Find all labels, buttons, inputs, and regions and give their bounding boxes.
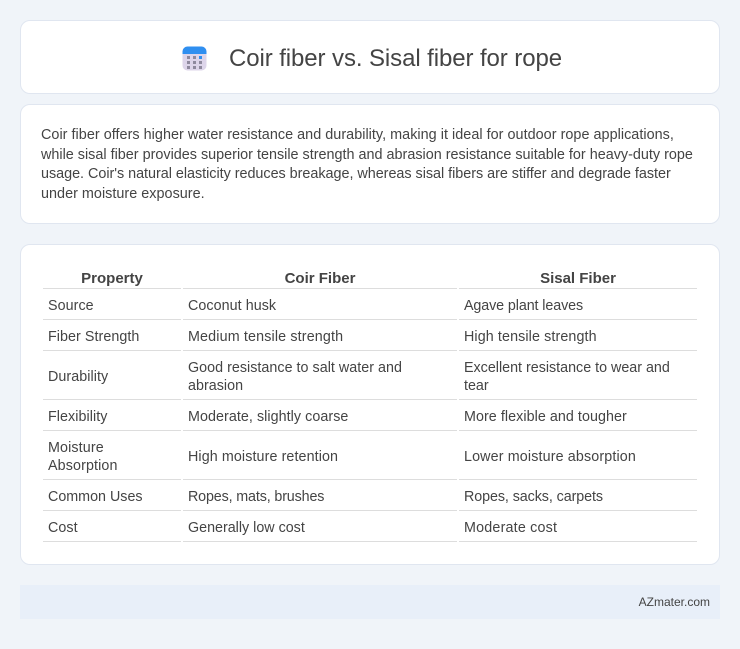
row: durability: abrasion — [188, 378, 243, 394]
footer bar — [20, 585, 720, 619]
row: common uses: Ropes, sacks, carpets — [464, 489, 603, 505]
footer credit: AZmater.com — [639, 595, 710, 609]
row: flexibility: Flexibility — [48, 409, 107, 425]
row: flexibility — [48, 409, 627, 425]
text block: summary: while sisal fiber provides superior tensile strength and abrasion resistance suitable for heavy-duty rope — [41, 146, 693, 162]
row: durability: Excellent resistance to wear and — [464, 360, 670, 376]
row: source — [48, 298, 583, 314]
row: cost: Moderate cost — [464, 520, 557, 536]
panel: title card — [20, 20, 720, 94]
row: source: Coconut husk — [188, 298, 276, 314]
row: fiber strength: Fiber Strength — [48, 329, 139, 345]
row: cost — [48, 520, 557, 536]
panel: summary text — [20, 104, 720, 224]
text block: summary: under moisture exposure. — [41, 186, 205, 202]
title: Coir fiber vs. Sisal fiber for rope — [229, 45, 562, 72]
row: durability — [48, 360, 670, 394]
row: common uses — [48, 489, 603, 505]
row: durability: tear — [464, 378, 489, 394]
panel: comparison table — [20, 244, 720, 565]
row lines — [43, 288, 697, 542]
row: fiber strength — [48, 329, 597, 345]
row: cost: Cost — [48, 520, 78, 536]
table header: Coir Fiber — [285, 270, 355, 287]
table header: Sisal Fiber — [540, 270, 616, 287]
table header — [81, 270, 616, 287]
table header: Property — [81, 270, 143, 287]
row: moisture absorption — [48, 440, 636, 474]
icon: calendar — [182, 46, 206, 70]
text block: summary: Coir fiber offers higher water resistance and durability, making it ideal for outdoor rope applications, — [41, 127, 674, 143]
row: durability: Good resistance to salt water and — [188, 360, 402, 376]
row: moisture absorption: Moisture — [48, 440, 104, 456]
text block: summary — [41, 127, 693, 202]
row: fiber strength: Medium tensile strength — [188, 329, 343, 345]
row: moisture absorption: Absorption — [48, 458, 118, 474]
row: common uses: Common Uses — [48, 489, 143, 505]
row: flexibility: More flexible and tougher — [464, 409, 627, 425]
row: cost: Generally low cost — [188, 520, 305, 536]
row: source: Agave plant leaves — [464, 298, 583, 314]
row: moisture absorption: High moisture retention — [188, 449, 338, 465]
row: source: Source — [48, 298, 94, 314]
row: fiber strength: High tensile strength — [464, 329, 597, 345]
text block: summary: usage. Coir's natural elasticity reduces breakage, whereas sisal fibers are stiffer and degrade faster — [41, 166, 671, 182]
row: durability: Durability — [48, 369, 108, 385]
row: common uses: Ropes, mats, brushes — [188, 489, 324, 505]
row: flexibility: Moderate, slightly coarse — [188, 409, 348, 425]
row: moisture absorption: Lower moisture absorption — [464, 449, 636, 465]
